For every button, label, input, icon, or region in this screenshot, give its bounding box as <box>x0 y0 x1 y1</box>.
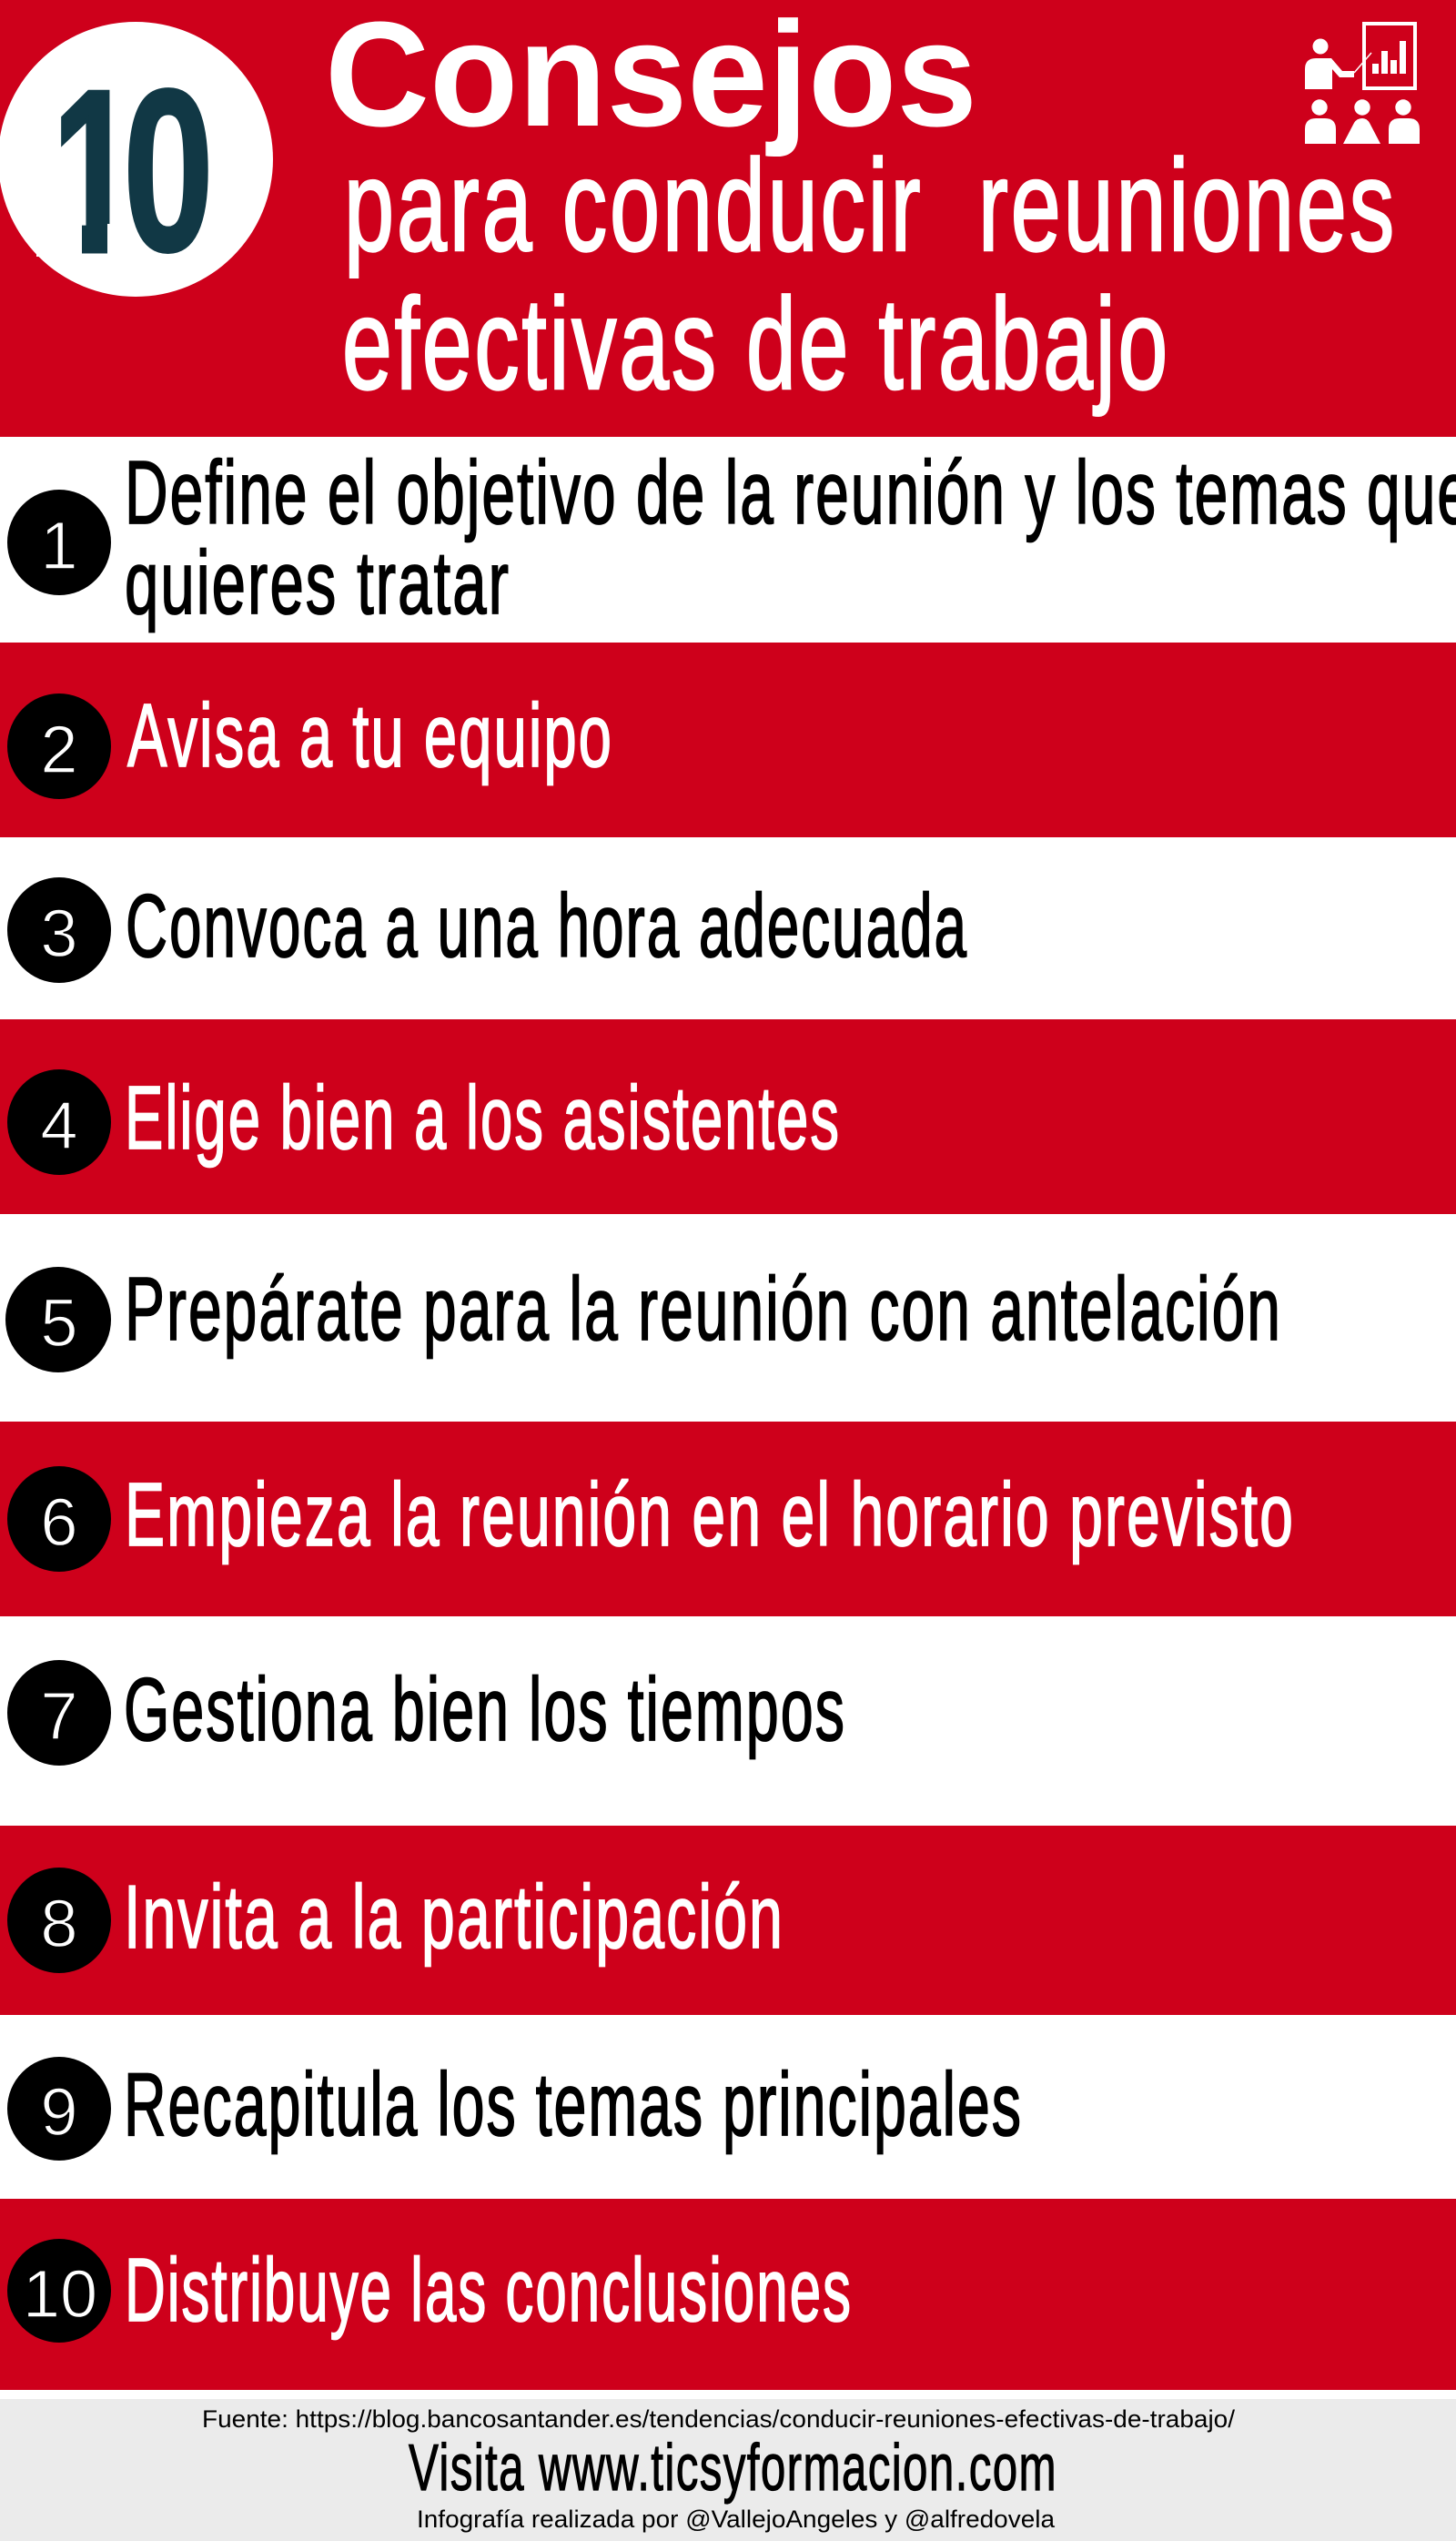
item 9 text: Recapitula los temas principales <box>124 2054 1023 2154</box>
website line: Visita www.ticsyformacion.com <box>409 2432 1057 2505</box>
number badge 6: 6 <box>40 1484 78 1560</box>
credits line: Infografía realizada por @VallejoAngeles y @alfredovela <box>417 2506 1056 2533</box>
item 1 <box>7 442 1456 633</box>
number badge 7 <box>7 1660 111 1766</box>
item 8 text: Invita a la participación <box>124 1867 784 1967</box>
number badge 1 <box>7 490 111 595</box>
item 1 text: quieres tratar <box>125 532 511 633</box>
number badge 6 <box>7 1466 111 1572</box>
number badge 5: 5 <box>40 1285 78 1361</box>
item 10 <box>0 2199 1456 2390</box>
number badge 9: 9 <box>40 2074 78 2150</box>
number badge 2 <box>7 693 111 799</box>
icon: presenter and audience <box>1305 24 1420 144</box>
number badge 10: 10 <box>23 2256 97 2332</box>
item 2 <box>0 643 1456 837</box>
badge: big number 10 <box>0 22 273 300</box>
footer panel <box>0 2399 1456 2541</box>
number badge 8 <box>7 1868 111 1973</box>
item 10 text: Distribuye las conclusiones <box>125 2240 853 2340</box>
number badge 7: 7 <box>40 1678 78 1754</box>
item 4 text: Elige bien a los asistentes <box>125 1068 841 1168</box>
number badge 9 <box>7 2057 111 2161</box>
badge: big number 10: 0 <box>123 41 214 299</box>
number badge 5 <box>5 1267 111 1372</box>
header panel <box>0 0 1456 437</box>
number badge 3: 3 <box>40 896 78 971</box>
number badge 8: 8 <box>40 1886 78 1961</box>
badge: big number 10: 1 <box>53 42 136 300</box>
item 7 <box>7 1659 846 1766</box>
source line: Fuente: https://blog.bancosantander.es/tendencias/conducir-reuniones-efectivas-de-trabajo/ <box>202 2405 1236 2433</box>
item 3 <box>7 876 968 983</box>
item 7 text: Gestiona bien los tiempos <box>124 1659 846 1759</box>
item 9 <box>7 2054 1023 2161</box>
number badge 4: 4 <box>40 1088 78 1163</box>
item 6 <box>0 1422 1456 1616</box>
item 4 <box>0 1019 1456 1214</box>
item 2 text: Avisa a tu equipo <box>127 685 613 785</box>
number badge 1: 1 <box>40 508 78 583</box>
item 8 <box>0 1826 1456 2015</box>
number badge 10 <box>7 2239 111 2343</box>
item 1 text <box>125 442 1456 633</box>
item 3 text: Convoca a una hora adecuada <box>126 876 968 976</box>
item 5 <box>5 1259 1282 1372</box>
number badge 4 <box>7 1069 111 1175</box>
number badge 3 <box>7 877 111 983</box>
number badge 2: 2 <box>40 712 78 787</box>
